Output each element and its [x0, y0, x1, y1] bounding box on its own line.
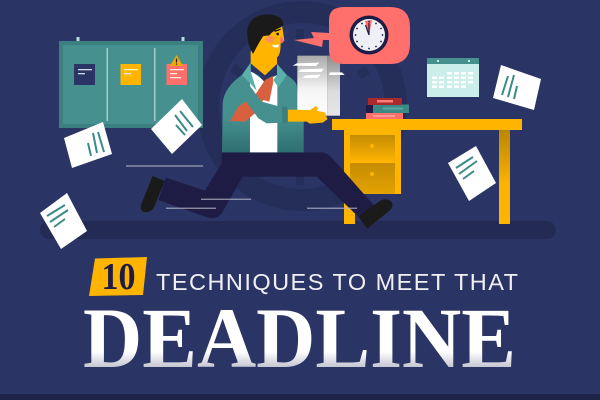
book stack [366, 98, 409, 119]
title line one: TECHNIQUES TO MEET THAT [156, 269, 518, 295]
hair [247, 14, 283, 54]
nose [280, 36, 284, 43]
lapel left [242, 63, 257, 91]
drawer bottom [350, 163, 395, 194]
front shoe [358, 199, 392, 229]
flying paper: left [64, 122, 112, 168]
floor [40, 221, 556, 239]
person running, drawn in 3x local coordinates [141, 14, 392, 229]
title line two: DEADLINE [83, 290, 516, 386]
flying paper: by desk [448, 146, 496, 201]
desk [332, 119, 522, 224]
trousers [158, 152, 375, 220]
neck and head [251, 23, 284, 75]
desk left leg [344, 190, 355, 224]
note: navy [74, 64, 95, 85]
clock [350, 16, 388, 54]
number badge: 10 [102, 256, 136, 298]
speech bubble with clock [294, 7, 410, 64]
icon: warning triangle [170, 55, 183, 66]
background clock ring [208, 12, 396, 200]
jacket [222, 63, 304, 152]
kanban board [59, 37, 203, 128]
sleeve [240, 82, 283, 123]
desk top [332, 119, 522, 130]
desk pedestal [344, 130, 401, 194]
hand [288, 106, 327, 124]
cheek [266, 36, 274, 43]
number badge [89, 256, 147, 298]
flying paper: top right [493, 65, 541, 110]
cuff shade [282, 107, 287, 123]
note: yellow [120, 64, 141, 85]
drawer top [350, 135, 395, 162]
bubble [294, 7, 410, 64]
bottom edge band [0, 394, 600, 400]
collar [251, 63, 277, 83]
title [83, 256, 518, 386]
eyebrow [274, 29, 281, 32]
paper stack [293, 56, 345, 116]
lapel right [273, 64, 287, 87]
speed lines [126, 166, 357, 209]
flying paper: over board [151, 99, 202, 154]
desk right leg [499, 130, 510, 224]
back shoe [141, 176, 165, 212]
calendar [427, 58, 479, 97]
flying paper: lower left [40, 193, 87, 249]
shirt [250, 70, 277, 152]
mouth [272, 44, 279, 47]
tie [230, 76, 273, 122]
eye [276, 33, 279, 35]
note: pink [166, 64, 187, 85]
